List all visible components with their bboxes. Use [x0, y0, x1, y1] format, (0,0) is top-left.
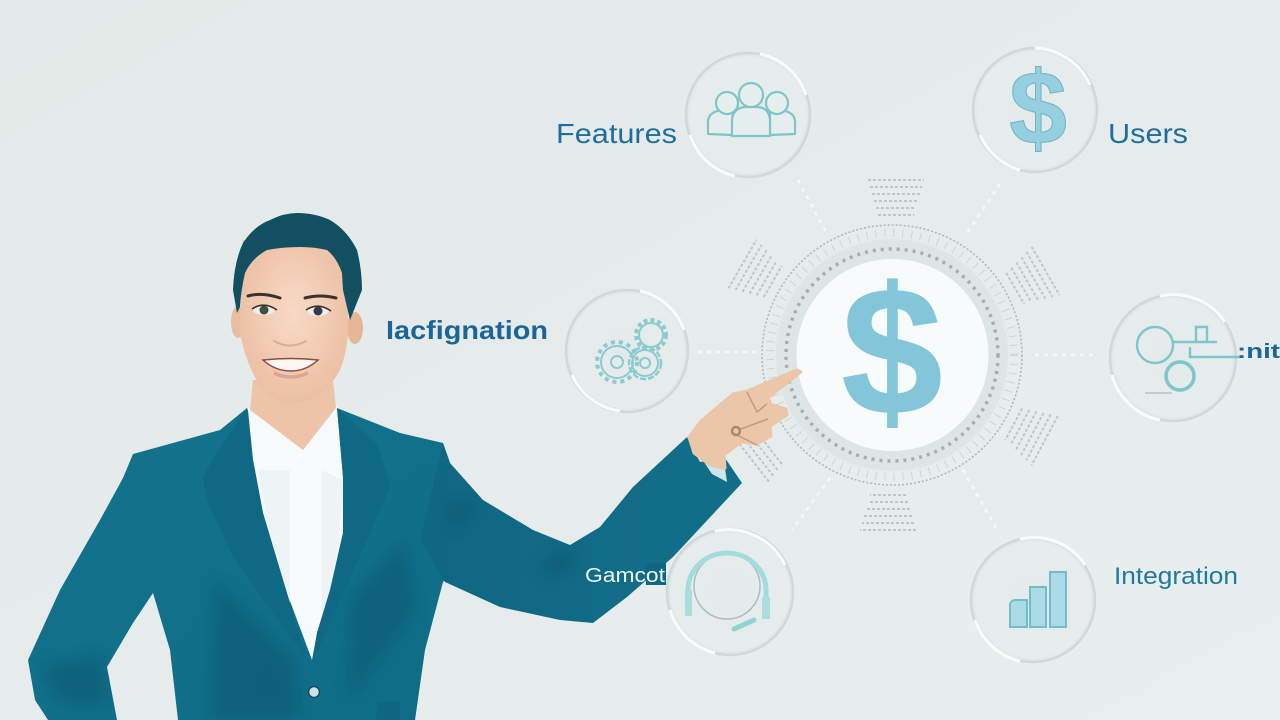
extended arm — [420, 437, 742, 623]
right ear — [347, 312, 363, 344]
label: cropped nit: :nit — [1237, 341, 1280, 363]
hair — [233, 213, 362, 320]
node circle — [1110, 295, 1236, 421]
lower lip — [274, 373, 308, 377]
body and left arm — [28, 408, 470, 720]
node circle — [667, 529, 793, 655]
feature node: gears — [566, 290, 688, 412]
label strip — [646, 563, 666, 585]
shirt — [248, 385, 343, 660]
node highlight — [975, 538, 1085, 661]
icon: headset — [685, 553, 770, 629]
person — [28, 213, 801, 720]
outer tick ring — [762, 225, 1022, 485]
connector lines — [698, 180, 1095, 530]
data block top — [868, 180, 924, 215]
label: Gamcot: Gamcot — [585, 565, 665, 587]
feature node: bar chart — [971, 538, 1095, 662]
dial spokes — [770, 233, 1014, 477]
icon: connected circles — [1137, 327, 1240, 393]
node circle — [973, 48, 1097, 172]
shirt fold — [258, 470, 343, 620]
label: Users: Users — [1108, 118, 1188, 149]
feature node: people — [686, 53, 810, 177]
label: Integration: Integration — [1114, 563, 1238, 590]
node circle — [971, 538, 1095, 662]
icon: gears — [597, 320, 666, 382]
node highlight — [670, 530, 785, 653]
feature node: dollar — [973, 48, 1097, 172]
node circle — [566, 290, 688, 412]
label: Iacfignation: Iacfignation — [386, 315, 548, 345]
eyes — [252, 305, 331, 316]
left lapel — [203, 408, 307, 661]
suit shading — [40, 540, 415, 720]
dial white centre — [796, 259, 988, 451]
data block upper right — [1001, 247, 1060, 313]
eye whites — [253, 305, 275, 315]
data block upper left — [728, 240, 787, 306]
node highlight — [980, 48, 1090, 170]
left ear — [231, 306, 245, 338]
smile — [263, 358, 318, 371]
label: Features: Features — [556, 118, 677, 149]
hand — [689, 370, 801, 468]
node highlight — [1112, 295, 1225, 420]
data block lower left — [734, 425, 785, 482]
nose — [274, 341, 306, 346]
face — [240, 240, 348, 403]
ring — [732, 427, 740, 435]
feature node: keys — [1110, 295, 1240, 421]
node circle — [686, 53, 810, 177]
eyebrows — [248, 294, 336, 298]
inner tick ring — [786, 249, 998, 461]
jacket button — [308, 686, 320, 698]
shirt cuff — [704, 462, 727, 482]
node highlight — [690, 54, 806, 176]
data block lower right — [1001, 400, 1058, 465]
data block bottom — [860, 495, 916, 530]
icon: bar chart — [1010, 572, 1066, 627]
elbow crease — [456, 510, 569, 570]
dial grey band — [776, 239, 1008, 471]
icon: large dollar sign: $ — [841, 249, 943, 453]
finger lines — [733, 392, 768, 445]
icon: people group — [708, 83, 795, 136]
node highlight — [572, 291, 684, 411]
right lapel — [313, 408, 390, 661]
icon: dollar sign: $ — [1009, 51, 1067, 167]
neck — [250, 380, 336, 450]
feature node: headset — [667, 529, 793, 655]
pocket — [376, 702, 400, 720]
central gear dial — [728, 180, 1060, 530]
